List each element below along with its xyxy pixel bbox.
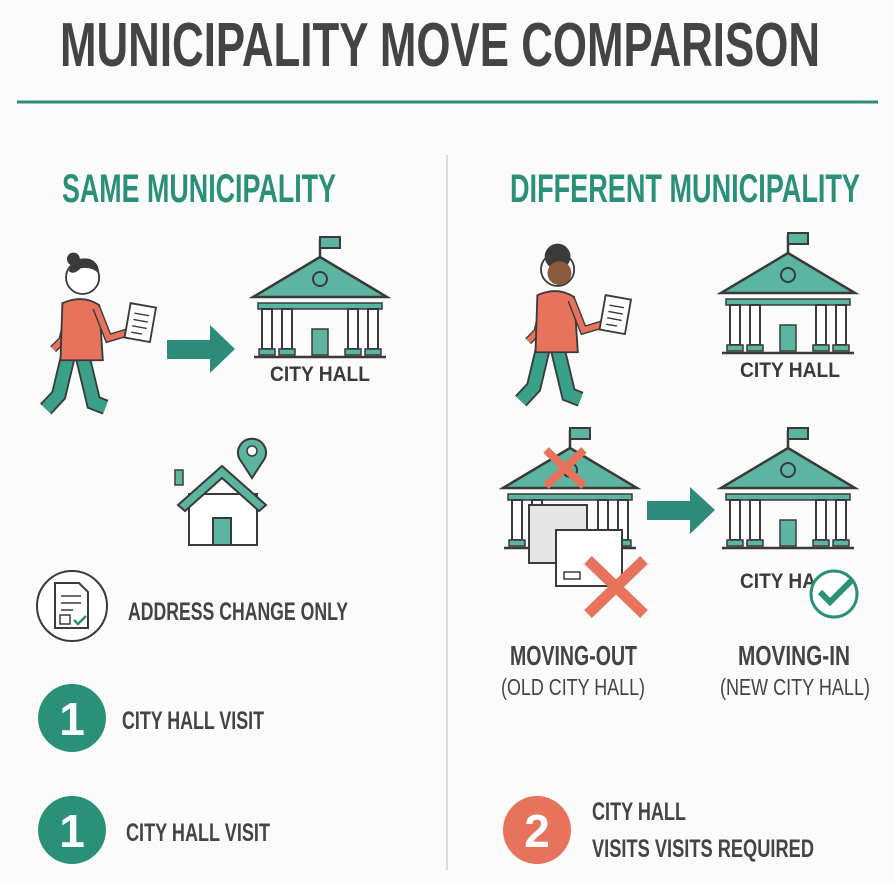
icon: city hall: CITY HALL	[270, 363, 370, 386]
label: moving-in	[720, 640, 870, 700]
badge 1 second: 1	[59, 805, 85, 857]
badge 1 second	[38, 796, 106, 864]
heading: same municipality: SAME MUNICIPALITY	[62, 167, 336, 211]
icon: document	[37, 571, 107, 641]
text: city hall visit: CITY HALL VISIT	[122, 707, 264, 735]
arrow	[167, 325, 235, 373]
text: visits required: CITY HALL	[592, 798, 686, 826]
text: visits required	[592, 798, 814, 863]
label: moving-out	[501, 640, 645, 700]
panel: different municipality	[501, 167, 870, 864]
icon: house with pin	[175, 439, 266, 545]
icon: old city hall crossed	[503, 428, 644, 614]
icon: city hall top	[721, 233, 855, 382]
panel: same municipality	[37, 167, 387, 864]
badge 2	[503, 796, 571, 864]
label: moving-in: MOVING-IN	[738, 640, 850, 671]
text: address change only: ADDRESS CHANGE ONLY	[128, 598, 348, 626]
label: moving-out: MOVING-OUT	[510, 640, 637, 671]
icon: person walking	[46, 253, 156, 409]
badge 1: 1	[59, 693, 85, 745]
text: city hall visit second: CITY HALL VISIT	[126, 819, 270, 847]
badge 2: 2	[524, 805, 550, 857]
icon: person walking 2	[521, 244, 631, 401]
badge 1	[38, 684, 106, 752]
label: moving-out: (OLD CITY HALL)	[501, 674, 645, 700]
icon: city hall top: CITY HALL	[740, 359, 840, 382]
text: visits required: VISITS VISITS REQUIRED	[592, 835, 814, 863]
icon: new city hall check	[721, 428, 857, 617]
icon: city hall	[253, 237, 387, 386]
icon: new city hall check: CITY HA	[740, 570, 816, 593]
arrow 2	[647, 487, 715, 534]
